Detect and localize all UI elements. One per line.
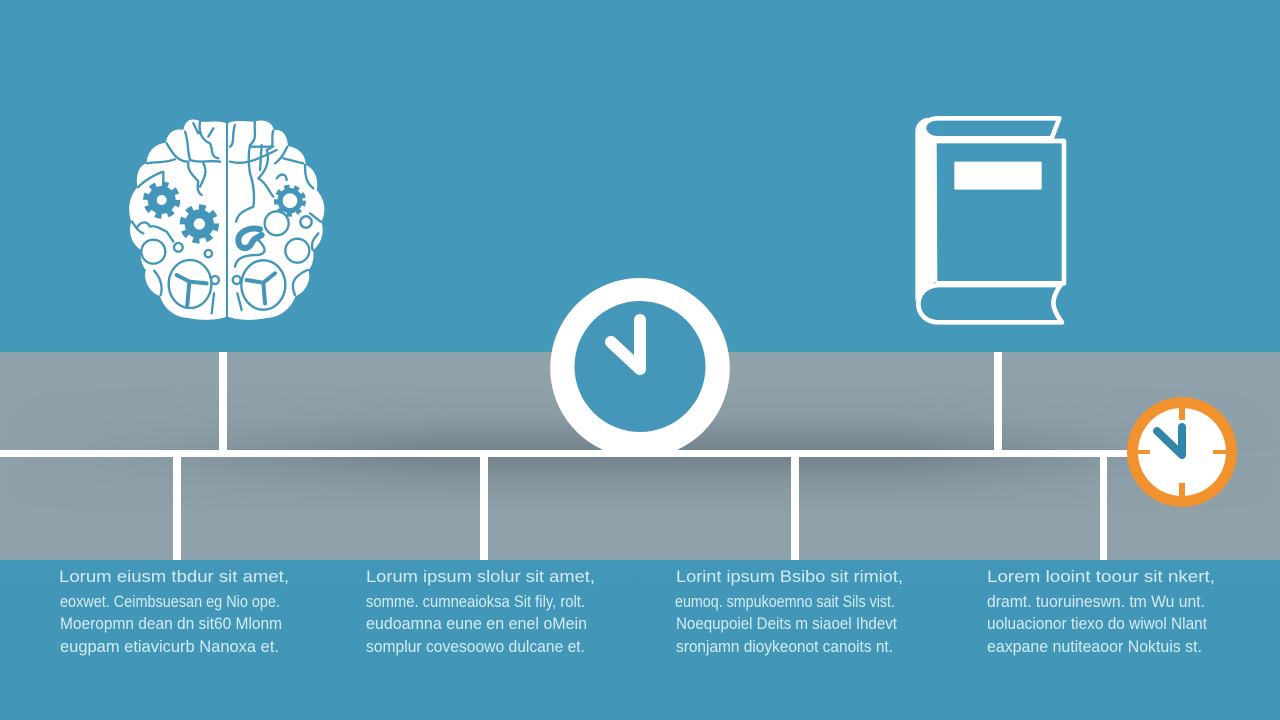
icon: orange clock <box>1132 402 1232 502</box>
icon: brain with gears <box>129 120 324 323</box>
text block 1 <box>59 567 289 656</box>
text block 1: eoxwet. Ceimbsuesan eg Nio ope. <box>60 592 280 611</box>
timeline: horizontal line and connectors <box>0 352 1135 560</box>
text block 2 <box>366 567 595 656</box>
text block 2: somplur covesoowo dulcane et. <box>366 637 585 656</box>
text block 3: Lorint ipsum Bsibo sit rimiot, <box>676 567 903 586</box>
gray timeline band <box>0 352 1280 560</box>
text block 2: eudoamna eune en enel oMein <box>366 614 587 633</box>
brain left hemisphere <box>129 120 227 320</box>
text block 3: Noequpoiel Deits m siaoel Ihdevt <box>676 614 897 633</box>
text block 1: eugpam etiavicurb Nanoxa et. <box>60 637 279 656</box>
brain folds and wheels <box>132 122 321 313</box>
icon: book <box>915 118 1064 322</box>
text block 4: Lorem looint toour sit nkert, <box>987 567 1215 586</box>
midline <box>226 120 228 323</box>
text block 1: Lorum eiusm tbdur sit amet, <box>59 567 289 586</box>
text block 3: sronjamn dioykeonot canoits nt. <box>676 637 893 656</box>
icon: central clock <box>550 278 730 452</box>
text block 4 <box>987 567 1215 656</box>
text block 2: somme. cumneaioksa Sit fily, rolt. <box>366 592 585 611</box>
swirl <box>238 229 262 248</box>
text block 3 <box>675 567 903 656</box>
brain right hemisphere <box>228 121 324 320</box>
wheel spokes <box>177 273 275 305</box>
gear one <box>146 184 177 216</box>
text block 4: eaxpane nutiteaoor Noktuis st. <box>987 637 1202 656</box>
text block 3: eumoq. smpukoemno sait Sils vist. <box>675 592 895 611</box>
gear three <box>276 187 304 215</box>
text block 4: uoluacionor tiexo do wiwol Nlant <box>987 614 1207 633</box>
text block 4: dramt. tuoruineswn. tm Wu unt. <box>987 592 1205 611</box>
text block 2: Lorum ipsum slolur sit amet, <box>366 567 595 586</box>
gear two <box>183 207 216 241</box>
book label <box>954 162 1042 190</box>
text block 1: Moeropmn dean dn sit60 Mlonm <box>60 614 282 633</box>
